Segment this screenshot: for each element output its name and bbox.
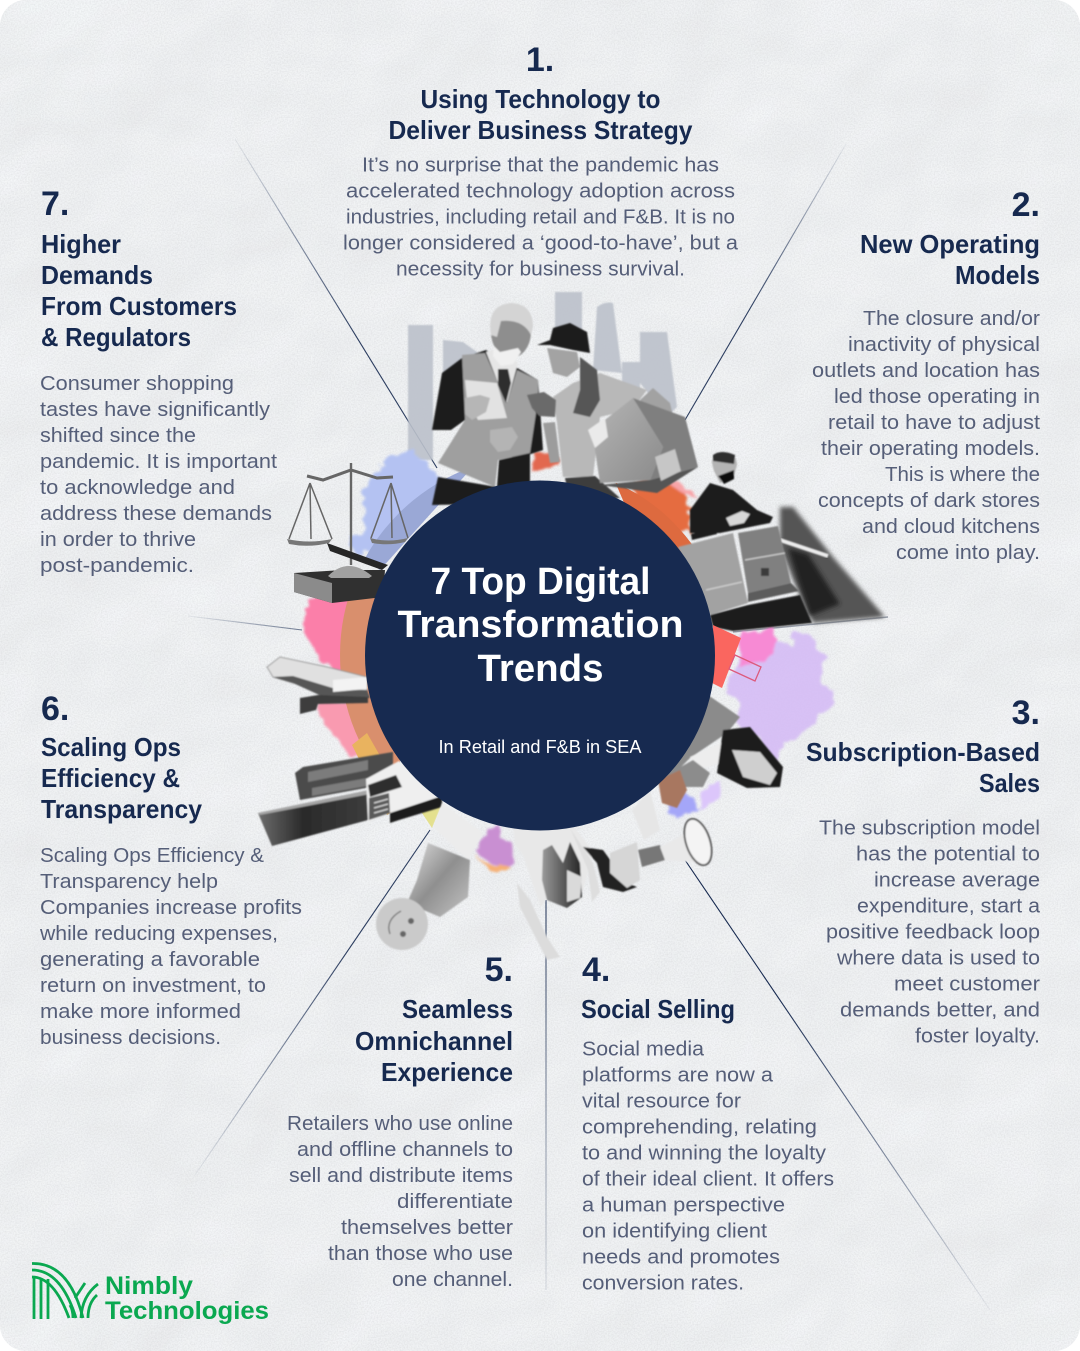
trend 1: accelerated technology adoption across bbox=[346, 179, 735, 202]
woman with box bbox=[527, 323, 698, 502]
trend 7: tastes have significantly bbox=[40, 398, 271, 421]
subtitle: In Retail and F&B in SEA bbox=[438, 737, 642, 757]
trend 1: 1. bbox=[526, 41, 554, 79]
trend 5: Omnichannel bbox=[355, 1026, 513, 1056]
trend 2: led those operating in bbox=[834, 385, 1040, 408]
colored ring behind the circle bbox=[366, 472, 466, 570]
main title bbox=[398, 561, 684, 690]
skyline bbox=[408, 292, 677, 460]
trend 4: needs and promotes bbox=[582, 1245, 780, 1268]
trend 5: 5. bbox=[485, 951, 513, 989]
trend 4: Social Selling bbox=[581, 994, 735, 1024]
trend 2: Models bbox=[955, 260, 1040, 290]
trend 3: 3. bbox=[1012, 694, 1040, 732]
trend 6: Transparency bbox=[41, 794, 203, 824]
trend 1: Using Technology to bbox=[420, 84, 660, 114]
trend 6: Scaling Ops bbox=[41, 732, 181, 762]
trend 5: Experience bbox=[381, 1057, 513, 1087]
man in vest bbox=[432, 303, 543, 505]
trend 2: their operating models. bbox=[821, 437, 1040, 460]
trend 2: 2. bbox=[1012, 186, 1040, 224]
trend 3: increase average bbox=[874, 868, 1040, 891]
trend 2: inactivity of physical bbox=[848, 333, 1040, 356]
trend 5: Retailers who use online bbox=[287, 1112, 513, 1135]
trend 2: This is where the bbox=[885, 463, 1040, 486]
logo: Nimbly Technologies: Technologies bbox=[105, 1297, 269, 1325]
trend 5: differentiate bbox=[397, 1190, 513, 1213]
main title: Trends bbox=[478, 648, 604, 690]
trend 5: than those who use bbox=[328, 1242, 513, 1265]
trend 4: on identifying client bbox=[582, 1219, 767, 1242]
trend 4: 4. bbox=[582, 951, 610, 989]
trend 3: expenditure, start a bbox=[857, 894, 1041, 917]
trend 3: demands better, and bbox=[840, 998, 1040, 1021]
trend 7: & Regulators bbox=[41, 322, 191, 352]
logo: Nimbly Technologies: Nimbly bbox=[105, 1272, 193, 1300]
trend 3: foster loyalty. bbox=[915, 1024, 1040, 1047]
trend 5 bbox=[287, 951, 513, 1291]
scales of justice and book bbox=[287, 463, 408, 603]
trend 6: Scaling Ops Efficiency & bbox=[40, 844, 264, 867]
trend 2: retail to have to adjust bbox=[828, 411, 1040, 434]
trend 7: Consumer shopping bbox=[40, 372, 234, 395]
trend 7: From Customers bbox=[41, 291, 237, 321]
trend 7: shifted since the bbox=[40, 424, 196, 447]
trend 7: in order to thrive bbox=[40, 528, 196, 551]
trend 6: Efficiency & bbox=[41, 763, 180, 793]
trend 7: address these demands bbox=[40, 502, 272, 525]
main title: Transformation bbox=[398, 604, 684, 646]
main title: 7 Top Digital bbox=[430, 561, 650, 603]
trend 3: has the potential to bbox=[856, 842, 1040, 865]
trend 4: of their ideal client. It offers bbox=[582, 1167, 834, 1190]
central circle bbox=[365, 480, 715, 830]
trend 3: Sales bbox=[979, 768, 1040, 798]
central photo collage bbox=[258, 292, 885, 960]
trend 7: 7. bbox=[41, 185, 69, 223]
trend 3: Subscription-Based bbox=[806, 737, 1040, 767]
trend 5: sell and distribute items bbox=[289, 1164, 513, 1187]
smiling woman bbox=[656, 695, 783, 808]
trend 1: It’s no surprise that the pandemic has bbox=[362, 153, 719, 176]
trend 2: and cloud kitchens bbox=[862, 515, 1040, 538]
trend 3 bbox=[806, 694, 1041, 1047]
trend 1 bbox=[343, 41, 739, 280]
upside-down women with megaphone bbox=[513, 790, 717, 960]
trend 4 bbox=[581, 951, 834, 1294]
shopping bag bbox=[712, 625, 761, 688]
trend 1: Deliver Business Strategy bbox=[388, 115, 693, 145]
trend 5: and offline channels to bbox=[297, 1138, 513, 1161]
trend 2: The closure and/or bbox=[863, 307, 1040, 330]
trend 6: generating a favorable bbox=[40, 948, 260, 971]
icon: logo arches bbox=[32, 1263, 98, 1319]
colour splashes bbox=[304, 448, 831, 874]
trend 7: Higher bbox=[41, 229, 121, 259]
trend 1: industries, including retail and F&B. It is no bbox=[346, 205, 735, 228]
trend 6: Companies increase profits bbox=[40, 896, 302, 919]
logo: Nimbly Technologies bbox=[32, 1263, 269, 1325]
trend 7: pandemic. It is important bbox=[40, 450, 277, 473]
trend 5: Seamless bbox=[402, 994, 513, 1024]
cargo ship and truck bbox=[258, 752, 442, 846]
trend 4: Social media bbox=[582, 1037, 705, 1060]
trend 4: platforms are now a bbox=[582, 1063, 774, 1086]
trend 2 bbox=[812, 186, 1040, 564]
trend 1: necessity for business survival. bbox=[396, 257, 685, 280]
trend 6: Transparency help bbox=[40, 870, 218, 893]
trend 6: make more informed bbox=[40, 1000, 241, 1023]
trend 3: where data is used to bbox=[836, 946, 1040, 969]
trend 6: 6. bbox=[41, 690, 69, 728]
trend 4: comprehending, relating bbox=[582, 1115, 817, 1138]
trend 6: return on investment, to bbox=[40, 974, 266, 997]
trend 2: come into play. bbox=[896, 541, 1040, 564]
trend 6 bbox=[39, 690, 302, 1049]
trend 4: a human perspective bbox=[582, 1193, 785, 1216]
trend 3: positive feedback loop bbox=[826, 920, 1040, 943]
trend 2: concepts of dark stores bbox=[818, 489, 1040, 512]
airplane bbox=[267, 657, 370, 714]
trend 2: New Operating bbox=[860, 229, 1040, 259]
trend 7 bbox=[40, 185, 277, 577]
trend 4: vital resource for bbox=[582, 1089, 741, 1112]
trend 6: while reducing expenses, bbox=[39, 922, 278, 945]
trend 7: Demands bbox=[41, 260, 153, 290]
trend 1: longer considered a ‘good-to-have’, but a bbox=[343, 231, 739, 254]
trend 5: themselves better bbox=[341, 1216, 513, 1239]
trend 3: The subscription model bbox=[819, 816, 1040, 839]
hand holding smiley bbox=[376, 803, 483, 950]
trend 4: to and winning the loyalty bbox=[582, 1141, 827, 1164]
trend 3: meet customer bbox=[894, 972, 1040, 995]
trend 5: one channel. bbox=[392, 1268, 513, 1291]
trend 2: outlets and location has bbox=[812, 359, 1040, 382]
trend 7: post-pandemic. bbox=[40, 554, 194, 577]
delivery man with bags bbox=[678, 452, 885, 631]
trend 4: conversion rates. bbox=[582, 1271, 744, 1294]
trend 7: to acknowledge and bbox=[40, 476, 235, 499]
trend 6: business decisions. bbox=[40, 1026, 221, 1049]
divider lines between trends bbox=[188, 139, 990, 1310]
